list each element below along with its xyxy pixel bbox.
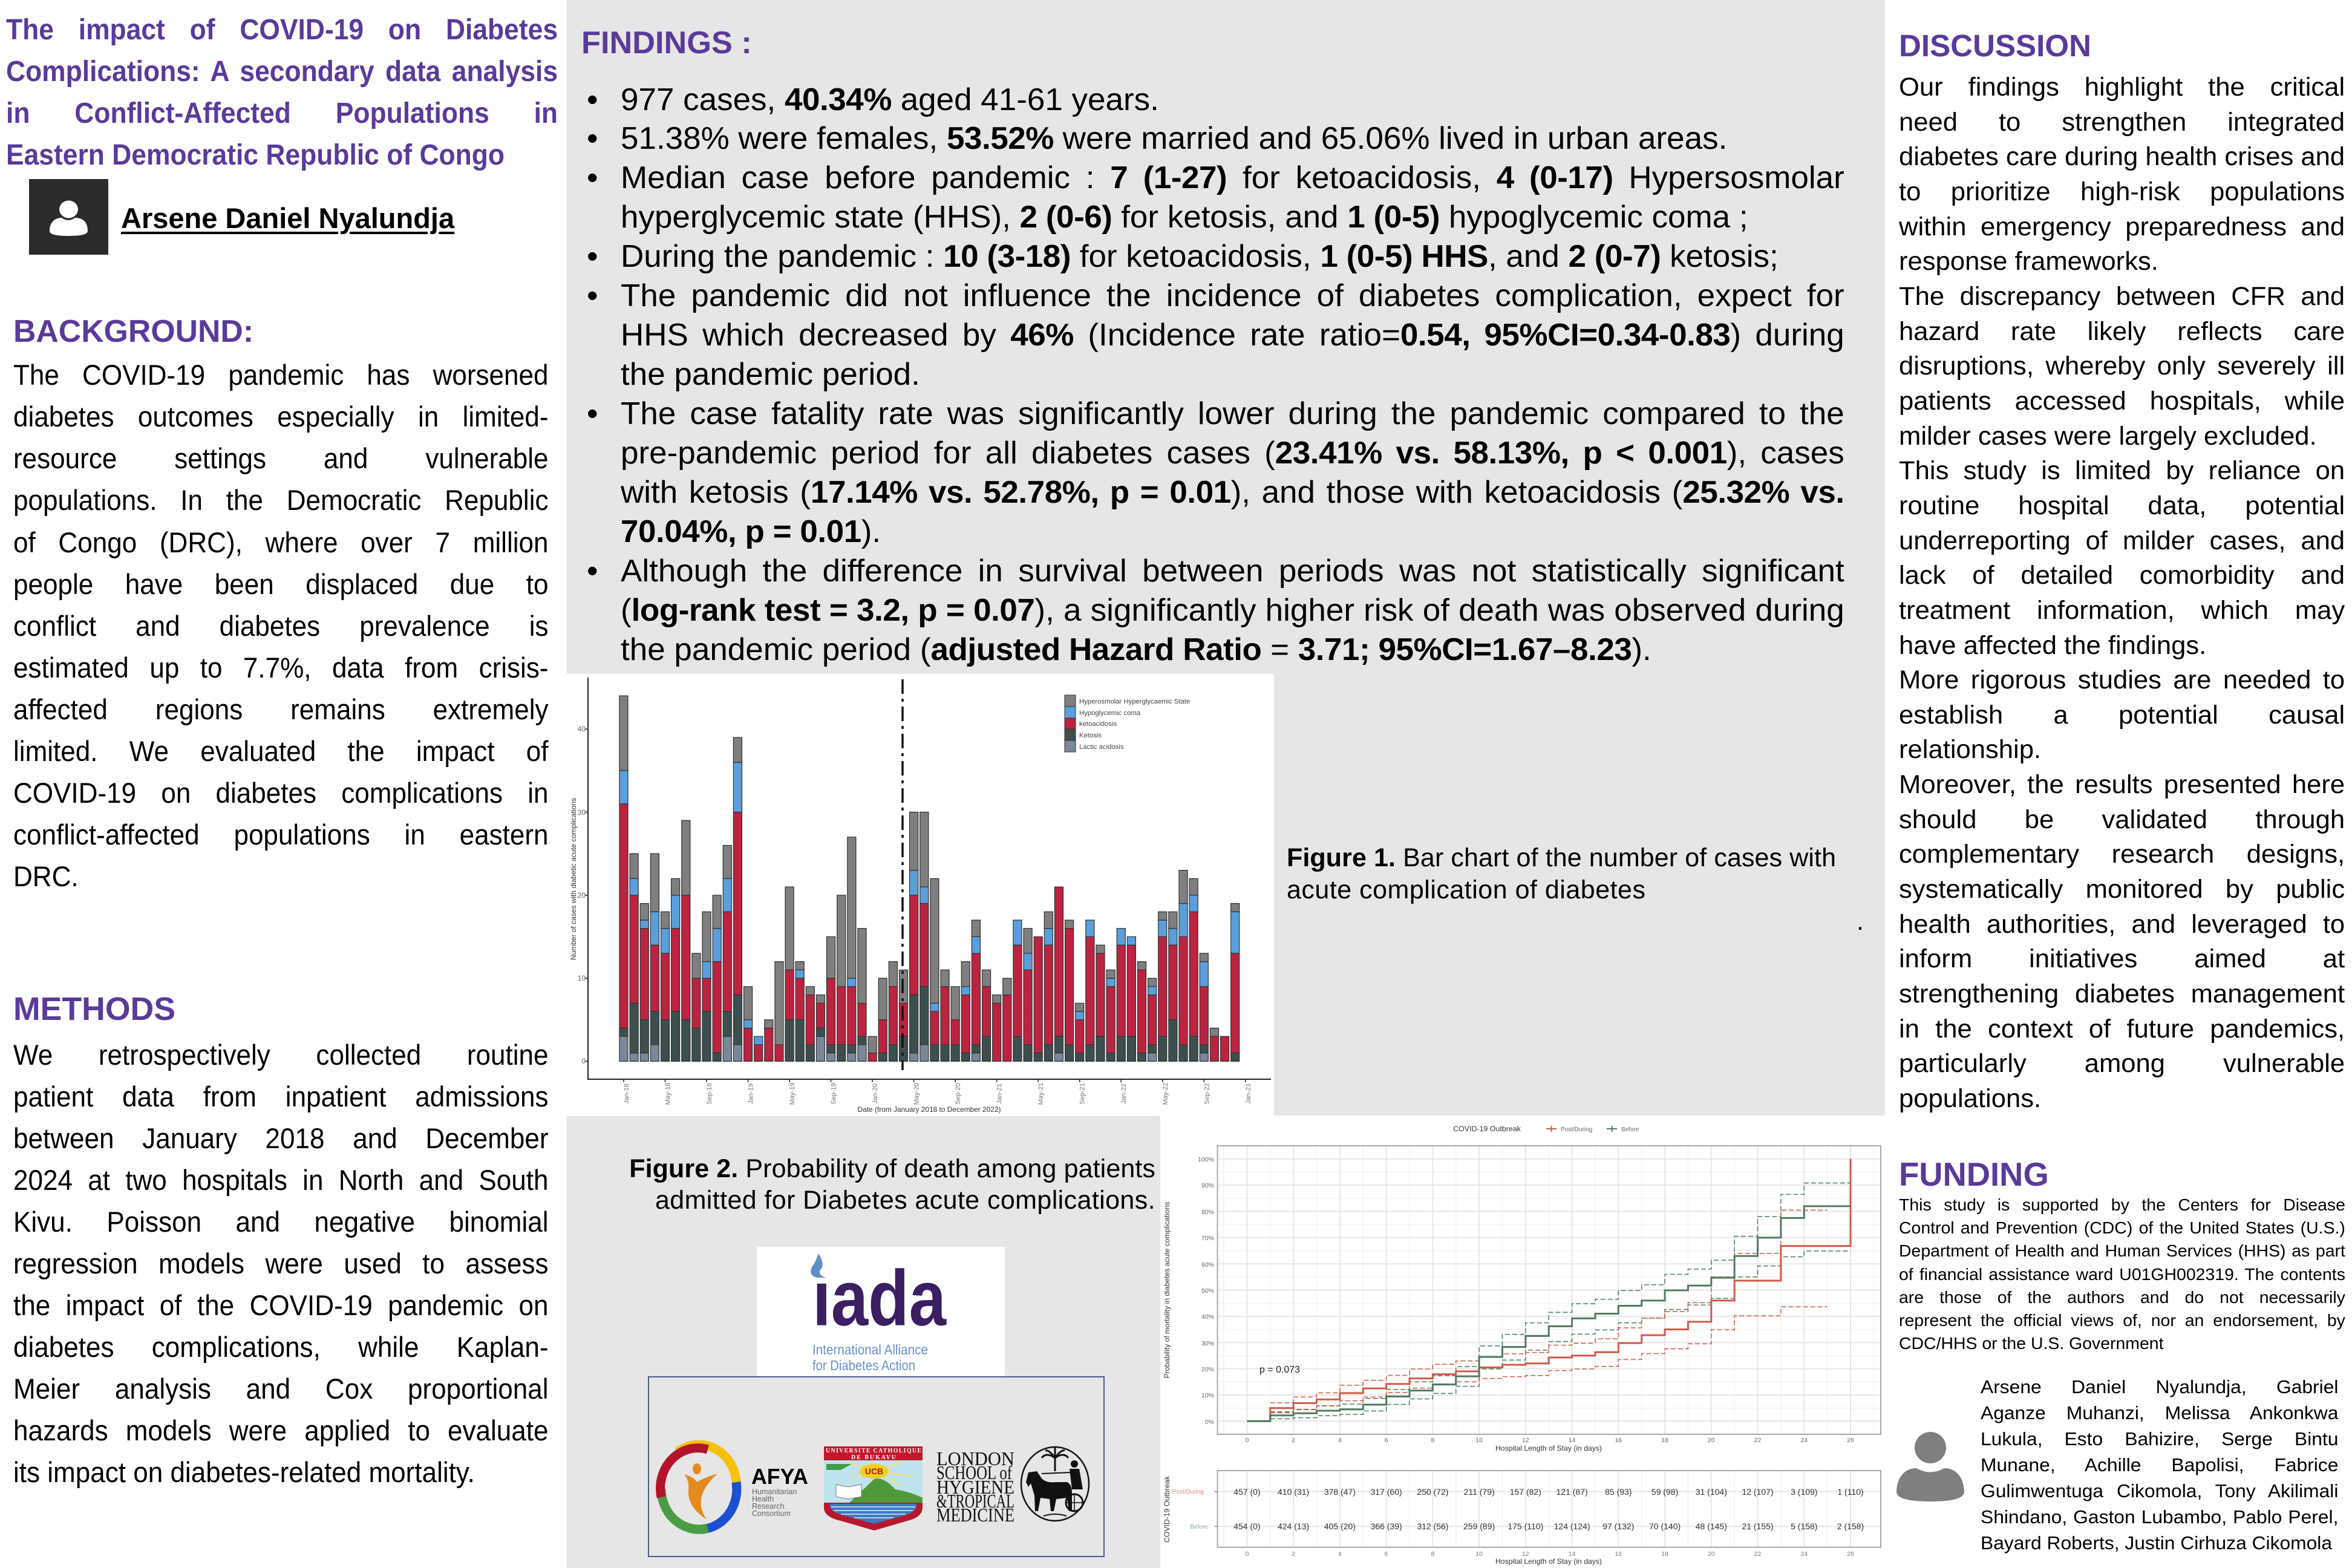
risk table: 4 (1338, 1550, 1342, 1558)
risk table: 157 (82) (1510, 1487, 1541, 1497)
legend: ketoacidosis (1079, 720, 1117, 728)
risk table: 2 (1292, 1550, 1295, 1558)
x axis date labels: Jan-20 (872, 1083, 879, 1104)
logo: IADA (757, 1247, 1005, 1376)
legend: Lactic acidosis (1079, 743, 1124, 751)
x axis labels: 12 (1522, 1437, 1529, 1444)
heading: background: BACKGROUND: (13, 313, 253, 348)
text block: background: resource settings and vulnerable (13, 442, 548, 474)
risk table: 24 (1800, 1550, 1808, 1558)
text block: discussion: More rigorous studies are needed to (1899, 665, 2345, 694)
text block: findings bullets: with ketosis (17.14% vs. 52.78%, p = 0.01), and those with ketoacidosis (25.32% vs. (621, 475, 1844, 510)
x axis labels: 2 (1292, 1437, 1295, 1444)
risk table: 97 (132) (1602, 1521, 1634, 1531)
logo: Universite Catholique de Bukavu crest: UCB (865, 1466, 883, 1476)
risk table: 31 (104) (1696, 1487, 1727, 1497)
x axis date labels: Sep-18 (706, 1083, 713, 1105)
x axis date labels: Sep-21 (1079, 1083, 1086, 1105)
text block: background: conflict-affected populations in eastern (13, 818, 548, 851)
text block: background: limited. We evaluated the impact of (13, 735, 548, 767)
logo: AFYA (661, 1445, 808, 1529)
logo: AFYA: Health (752, 1495, 774, 1503)
axis titles: Number of cases with diabetic acute complications (569, 798, 578, 960)
text block: findings bullets: Median case before pandemic : 7 (1-27) for ketoacidosis, 4 (0-17) Hypersosmolar (621, 160, 1844, 195)
y axis labels: 10% (1201, 1392, 1214, 1399)
risk table: 20 (1708, 1550, 1715, 1558)
text block: funding: are those of the authors and do not necessarily (1899, 1288, 2345, 1307)
caption: figure 2: admitted for Diabetes acute complications. (655, 1186, 1155, 1215)
logo: AFYA: AFYA (751, 1464, 808, 1489)
text block: discussion: have affected the findings. (1899, 630, 2206, 659)
heading: methods: METHODS (13, 991, 175, 1027)
text block: authors: Gulimwentuga Cikomola, Tony Akilimali (1981, 1480, 2338, 1501)
risk table: 259 (89) (1463, 1521, 1495, 1531)
chart: figure 2 Kaplan-Meier mortality curve with risk table (1160, 1116, 1885, 1568)
risk table: 16 (1615, 1550, 1622, 1558)
text: • (587, 278, 598, 313)
text: • (587, 554, 598, 589)
pandemic onset dashed line (901, 679, 904, 1070)
text block: discussion: populations. (1899, 1084, 2041, 1113)
text block: funding (1899, 1194, 2345, 1355)
text block: methods (13, 1039, 548, 1488)
x axis date labels (623, 1083, 1252, 1105)
x axis labels: 14 (1569, 1437, 1576, 1444)
text block: methods: its impact on diabetes-related mortality. (13, 1456, 474, 1488)
text block: authors (1981, 1374, 2338, 1556)
risk table: 211 (79) (1464, 1487, 1495, 1497)
text block: discussion: to prioritize high-risk populations (1899, 177, 2345, 206)
text block: methods: diabetes complications, while Kaplan- (13, 1331, 548, 1363)
x axis date labels: May-19 (789, 1083, 796, 1105)
text block: findings bullets: the pandemic period (adjusted Hazard Ratio = 3.71; 95%CI=1.67–8.23). (621, 632, 1651, 667)
text block: findings bullets (621, 80, 1844, 670)
risk table: 8 (1431, 1550, 1434, 1558)
risk table: 124 (124) (1554, 1521, 1590, 1531)
text block: discussion: strengthening diabetes management (1899, 979, 2345, 1008)
legend: Before (1621, 1126, 1639, 1133)
axis titles: Hospital Length of Stay (in days) (1495, 1444, 1602, 1452)
text block: findings bullets: 977 cases, 40.34% aged 41-61 years. (621, 82, 1159, 117)
text block: background: populations. In the Democratic Republic (13, 484, 548, 516)
panel: central gray background (567, 0, 1885, 1568)
risk table: 10 (1475, 1550, 1483, 1558)
logo: IADA: for Diabetes Action (812, 1357, 915, 1373)
survival curves (1247, 1159, 1851, 1421)
risk table: 454 (0) (1233, 1521, 1261, 1531)
logo: IADA: International Alliance (812, 1342, 928, 1357)
title (6, 14, 558, 171)
text block: methods: patient data from inpatient admissions (13, 1080, 548, 1112)
text block: discussion: establish a potential causal (1899, 701, 2345, 730)
text block: discussion: systematically monitored by public (1899, 875, 2345, 904)
text block: discussion: underreporting of milder cases, and (1899, 526, 2345, 555)
title: Complications: A secondary data analysis (6, 56, 558, 88)
logo: AFYA: Consortium (752, 1509, 791, 1518)
caption: figure 2 (605, 1153, 1155, 1216)
y axis labels: 90% (1201, 1182, 1214, 1189)
x axis labels: 0 (1245, 1437, 1249, 1444)
icon: authors avatar (1893, 1428, 1967, 1505)
text block: discussion: diabetes care during health crises and (1899, 142, 2345, 171)
panel: partner logos box (647, 1376, 1106, 1558)
title: in Conflict-Affected Populations in (6, 97, 558, 129)
risk table: 21 (155) (1742, 1521, 1774, 1531)
logo: Universite Catholique de Bukavu crest (824, 1446, 923, 1530)
text block: funding: Control and Prevention (CDC) of the United States (U.S.) (1899, 1218, 2345, 1237)
text block: discussion: inform initiatives aimed at (1899, 944, 2345, 973)
text block: findings bullets: pre-pandemic period for all diabetes cases (23.41% vs. 58.13%, p < 0.001), cases (621, 436, 1844, 471)
text block: discussion: hazard rate likely reflects care (1899, 317, 2345, 346)
x axis date labels: Jan-22 (1120, 1083, 1128, 1104)
stacked bars (619, 696, 1240, 1061)
logo: LSHTM wordmark: SCHOOL of (936, 1462, 1012, 1483)
text block: discussion: should be validated through (1899, 805, 2345, 834)
text block: background: of Congo (DRC), where over 7 million (13, 526, 548, 558)
title: Eastern Democratic Republic of Congo (6, 139, 505, 171)
heading: discussion: DISCUSSION (1899, 28, 2091, 63)
text block: background: people have been displaced due to (13, 568, 548, 600)
text block: background: conflict and diabetes prevalence is (13, 610, 548, 642)
text block: findings bullets: hyperglycemic state (HHS), 2 (0-6) for ketosis, and 1 (0-5) hypoglycemic coma ; (621, 200, 1748, 235)
y axis labels: 0 (581, 1057, 586, 1065)
logo: Universite Catholique de Bukavu crest: UNIVERSITE CATHOLIQUE (826, 1448, 921, 1454)
risk table: 457 (0) (1233, 1487, 1261, 1497)
text block: findings bullets: 51.38% were females, 53.52% were married and 65.06% lived in urban areas. (621, 121, 1727, 156)
logo: IADA: iada (812, 1254, 947, 1342)
risk table: 26 (1847, 1550, 1854, 1558)
x axis labels: 16 (1615, 1437, 1622, 1444)
risk table: Before (1191, 1524, 1208, 1530)
text block: authors: Shindano, Gaston Lubambo, Pablo Perel, (1981, 1506, 2338, 1527)
y axis labels: 50% (1201, 1287, 1214, 1295)
text block: background: estimated up to 7.7%, data from crisis- (13, 652, 548, 684)
y axis labels: 100% (1198, 1156, 1214, 1163)
x axis date labels: Sep-20 (955, 1083, 962, 1105)
legend: Post/During (1561, 1126, 1592, 1133)
y axis labels: 80% (1201, 1209, 1214, 1216)
y axis labels: 70% (1201, 1235, 1214, 1242)
axis titles: Date (from January 2018 to December 2022) (858, 1105, 1001, 1114)
risk table: 378 (47) (1324, 1487, 1356, 1497)
x axis labels: 10 (1475, 1437, 1483, 1444)
logo: LSHTM wordmark: &TROPICAL (936, 1490, 1014, 1512)
risk table: 48 (145) (1696, 1521, 1727, 1531)
y axis labels: 60% (1201, 1261, 1214, 1269)
text block: methods: Meier analysis and Cox proportional (13, 1373, 548, 1405)
risk table: 12 (107) (1742, 1487, 1774, 1497)
heading: funding: FUNDING (1899, 1155, 2049, 1193)
legend (1453, 1125, 1639, 1133)
logo: LSHTM wordmark: HYGIENE (936, 1476, 1014, 1498)
text block: discussion: relationship. (1899, 735, 2041, 764)
logo: LSHTM seal (1021, 1447, 1089, 1521)
risk table: 85 (93) (1605, 1487, 1632, 1497)
risk table: 250 (72) (1417, 1487, 1448, 1497)
text block: methods: 2024 at two hospitals in North and South (13, 1164, 548, 1196)
text block: authors: Aganze Muhanzi, Melissa Ankonkwa (1981, 1402, 2338, 1423)
text block: methods: the impact of the COVID-19 pandemic on (13, 1289, 548, 1321)
text: • (587, 396, 598, 431)
x axis labels: 4 (1338, 1437, 1342, 1444)
y axis labels: 40% (1201, 1313, 1214, 1321)
text: • (587, 160, 598, 195)
risk table: Post/During (1172, 1489, 1204, 1495)
x axis date labels: Jan-21 (996, 1083, 1004, 1104)
x axis date labels: May-18 (664, 1083, 671, 1105)
x axis labels: 18 (1661, 1437, 1668, 1444)
presenter name: Arsene Daniel Nyalundja (121, 202, 454, 234)
text: • (587, 121, 598, 156)
chart: figure 1 stacked bar chart (566, 674, 1274, 1116)
risk table: 1 (110) (1837, 1487, 1864, 1497)
logo: LSHTM wordmark (936, 1448, 1014, 1526)
y axis labels: 40 (578, 725, 586, 733)
text block: discussion (1899, 70, 2345, 1117)
risk table: 70 (140) (1649, 1521, 1681, 1531)
x axis date labels: Jan-23 (1245, 1083, 1252, 1104)
text block: background: DRC. (13, 860, 78, 892)
x axis labels: 6 (1385, 1437, 1388, 1444)
text block: findings bullets: HHS which decreased by 46% (Incidence rate ratio=0.54, 95%CI=0.34-0.83) during (621, 318, 1844, 353)
risk table: 6 (1385, 1550, 1388, 1558)
y axis labels (578, 725, 586, 1065)
text block: funding: CDC/HHS or the U.S. Government (1899, 1334, 2163, 1353)
logo: LSHTM wordmark: LONDON (936, 1448, 1014, 1469)
text block: methods: regression models were used to assess (13, 1247, 548, 1279)
text: • (587, 239, 598, 274)
text block: findings bullets: Although the difference in survival between periods was not statistically significant (621, 554, 1844, 589)
y axis labels: 30 (578, 808, 586, 817)
legend (1065, 695, 1190, 752)
x axis date labels: May-22 (1162, 1083, 1169, 1105)
text block: funding: This study is supported by the Centers for Disease (1899, 1195, 2345, 1214)
heading: findings: FINDINGS : (581, 25, 752, 60)
text block: discussion: patients accessed hospitals, while (1899, 387, 2345, 416)
plot gridlines (1218, 1146, 1881, 1434)
text block: authors: Arsene Daniel Nyalundja, Gabriel (1981, 1376, 2338, 1397)
risk table: 5 (158) (1791, 1521, 1817, 1531)
text block: discussion: health authorities, and leveraged to (1899, 910, 2345, 939)
text block: discussion: milder cases were largely excluded. (1899, 422, 2317, 451)
text block: methods: Kivu. Poisson and negative binomial (13, 1206, 548, 1238)
x axis date labels: May-20 (913, 1083, 921, 1105)
logo: AFYA: Humanitarian (752, 1488, 797, 1496)
risk table: 3 (109) (1791, 1487, 1817, 1497)
text block: methods: hazards models were applied to evaluate (13, 1414, 548, 1446)
risk table: 366 (39) (1371, 1521, 1402, 1531)
text block: discussion: routine hospital data, potential (1899, 491, 2345, 520)
risk table: COVID-19 Outbreak (1163, 1475, 1171, 1543)
x axis labels: 26 (1847, 1437, 1854, 1444)
stray period mark: . (1857, 907, 1864, 936)
text block: background (13, 359, 549, 892)
axis titles (569, 798, 1001, 1114)
risk table: 12 (1522, 1550, 1529, 1558)
logo: Universite Catholique de Bukavu crest: DE BUKAVU (851, 1454, 896, 1461)
x axis date labels: May-21 (1037, 1083, 1045, 1105)
risk table (1163, 1471, 1881, 1566)
text block: discussion: complementary research designs, (1899, 840, 2345, 869)
risk table: 175 (110) (1508, 1521, 1543, 1531)
text block: findings bullets: 70.04%, p = 0.01). (621, 514, 881, 549)
risk table: Hospital Length of Stay (in days) (1495, 1557, 1602, 1566)
x axis date labels: Jan-19 (748, 1083, 755, 1104)
text block: discussion: need to strengthen integrated (1899, 108, 2345, 137)
text block: discussion: in the context of future pandemics, (1899, 1014, 2345, 1044)
caption: figure 1: Figure 1. Bar chart of the number of cases with (1287, 843, 1836, 872)
text block: discussion: within emergency preparedness and (1899, 212, 2345, 241)
legend: Ketosis (1079, 732, 1102, 739)
icon: presenter avatar (29, 179, 108, 255)
x axis labels: 24 (1800, 1437, 1808, 1444)
x axis date labels: Sep-19 (831, 1083, 838, 1105)
axis titles (1163, 1201, 1602, 1452)
text block: findings bullets: The case fatality rate was significantly lower during the pandemic compared to the (621, 396, 1844, 431)
text block: methods: between January 2018 and December (13, 1122, 548, 1154)
caption: figure 1: acute complication of diabetes (1287, 875, 1645, 904)
axis titles: Probability of mortality in diabetes acute complications (1163, 1201, 1171, 1378)
text block: discussion: The discrepancy between CFR and (1899, 282, 2345, 311)
text block: discussion: response frameworks. (1899, 247, 2158, 276)
text block: discussion: lack of detailed comorbidity and (1899, 561, 2345, 590)
logo: LSHTM wordmark: MEDICINE (936, 1504, 1014, 1526)
y axis labels (1198, 1156, 1214, 1426)
risk table: 2 (158) (1837, 1521, 1864, 1531)
text block: funding: represent the official views of, nor an endorsement, by (1899, 1311, 2345, 1330)
text block: discussion: This study is limited by reliance on (1899, 456, 2345, 485)
x axis labels: 8 (1431, 1437, 1434, 1444)
text block: findings bullets: During the pandemic : 10 (3-18) for ketoacidosis, 1 (0-5) HHS, and 2 (0-7) ketosis; (621, 239, 1779, 274)
text block: discussion: disruptions, whereby only severely ill (1899, 351, 2345, 381)
legend: Hyperosmolar Hyperglycaemic State (1079, 698, 1190, 705)
text block: background: COVID-19 on diabetes complications in (13, 777, 548, 809)
legend: Hypoglycemic coma (1079, 710, 1141, 717)
text block: methods: We retrospectively collected routine (13, 1039, 548, 1071)
text block: findings bullets: the pandemic period. (621, 357, 920, 392)
text block: discussion: Moreover, the results presented here (1899, 770, 2345, 799)
risk table: 317 (60) (1371, 1487, 1402, 1497)
y axis labels: 0% (1205, 1419, 1214, 1426)
x axis labels: 22 (1754, 1437, 1761, 1444)
y axis labels: 20 (578, 891, 586, 900)
text: • (587, 82, 598, 117)
y axis labels: 10 (578, 974, 586, 982)
x axis date labels: Sep-22 (1203, 1083, 1210, 1105)
text block: background: diabetes outcomes especially in limited- (13, 400, 548, 433)
title: The impact of COVID-19 on Diabetes (6, 14, 558, 46)
risk table: 0 (1245, 1550, 1249, 1558)
x axis date labels: Jan-18 (623, 1083, 630, 1104)
text block: background: The COVID-19 pandemic has worsened (13, 359, 548, 391)
x axis labels: 20 (1708, 1437, 1715, 1444)
y axis labels: 20% (1201, 1366, 1214, 1373)
risk table: 405 (20) (1324, 1521, 1356, 1531)
text block: funding: of financial assistance ward U01GH002319. The contents (1899, 1265, 2345, 1284)
x axis labels (1245, 1437, 1854, 1444)
y axis labels: 30% (1201, 1340, 1214, 1347)
risk table: 121 (87) (1557, 1487, 1588, 1497)
p-value label: p = 0.073 (1259, 1365, 1300, 1375)
risk table: 312 (56) (1417, 1521, 1448, 1531)
text block: discussion: particularly among vulnerable (1899, 1049, 2345, 1078)
text block: findings bullets: (log-rank test = 3.2, p = 0.07), a significantly higher risk of death was observed during (621, 593, 1844, 628)
logo: AFYA: Research (752, 1502, 785, 1511)
plot frame (1217, 1146, 1881, 1434)
risk table: 424 (13) (1278, 1521, 1309, 1531)
text block: authors: Lukula, Esto Bahizire, Serge Bintu (1981, 1428, 2338, 1449)
risk table: 14 (1569, 1550, 1576, 1558)
axes (585, 678, 1271, 1082)
risk table: 410 (31) (1278, 1487, 1309, 1497)
text block: funding: Department of Health and Human Services (HHS) as part (1899, 1241, 2345, 1260)
text block: discussion: treatment information, which may (1899, 596, 2345, 625)
caption: figure 2: Figure 2. Probability of death among patients (629, 1154, 1155, 1183)
text block: authors: Bayard Roberts, Justin Cirhuza Cikomola (1981, 1532, 2332, 1553)
legend: COVID-19 Outbreak (1453, 1125, 1521, 1133)
risk table: 22 (1754, 1550, 1761, 1558)
text block: findings bullets: The pandemic did not influence the incidence of diabetes complication, expect for (621, 278, 1844, 313)
text block: background: affected regions remains extremely (13, 693, 548, 725)
risk table: 59 (98) (1651, 1487, 1678, 1497)
text block: authors: Munane, Achille Bapolisi, Fabrice (1981, 1454, 2338, 1475)
caption: figure 1 (1287, 842, 1836, 906)
risk table: 18 (1661, 1550, 1668, 1558)
text block: discussion: Our findings highlight the critical (1899, 73, 2345, 102)
